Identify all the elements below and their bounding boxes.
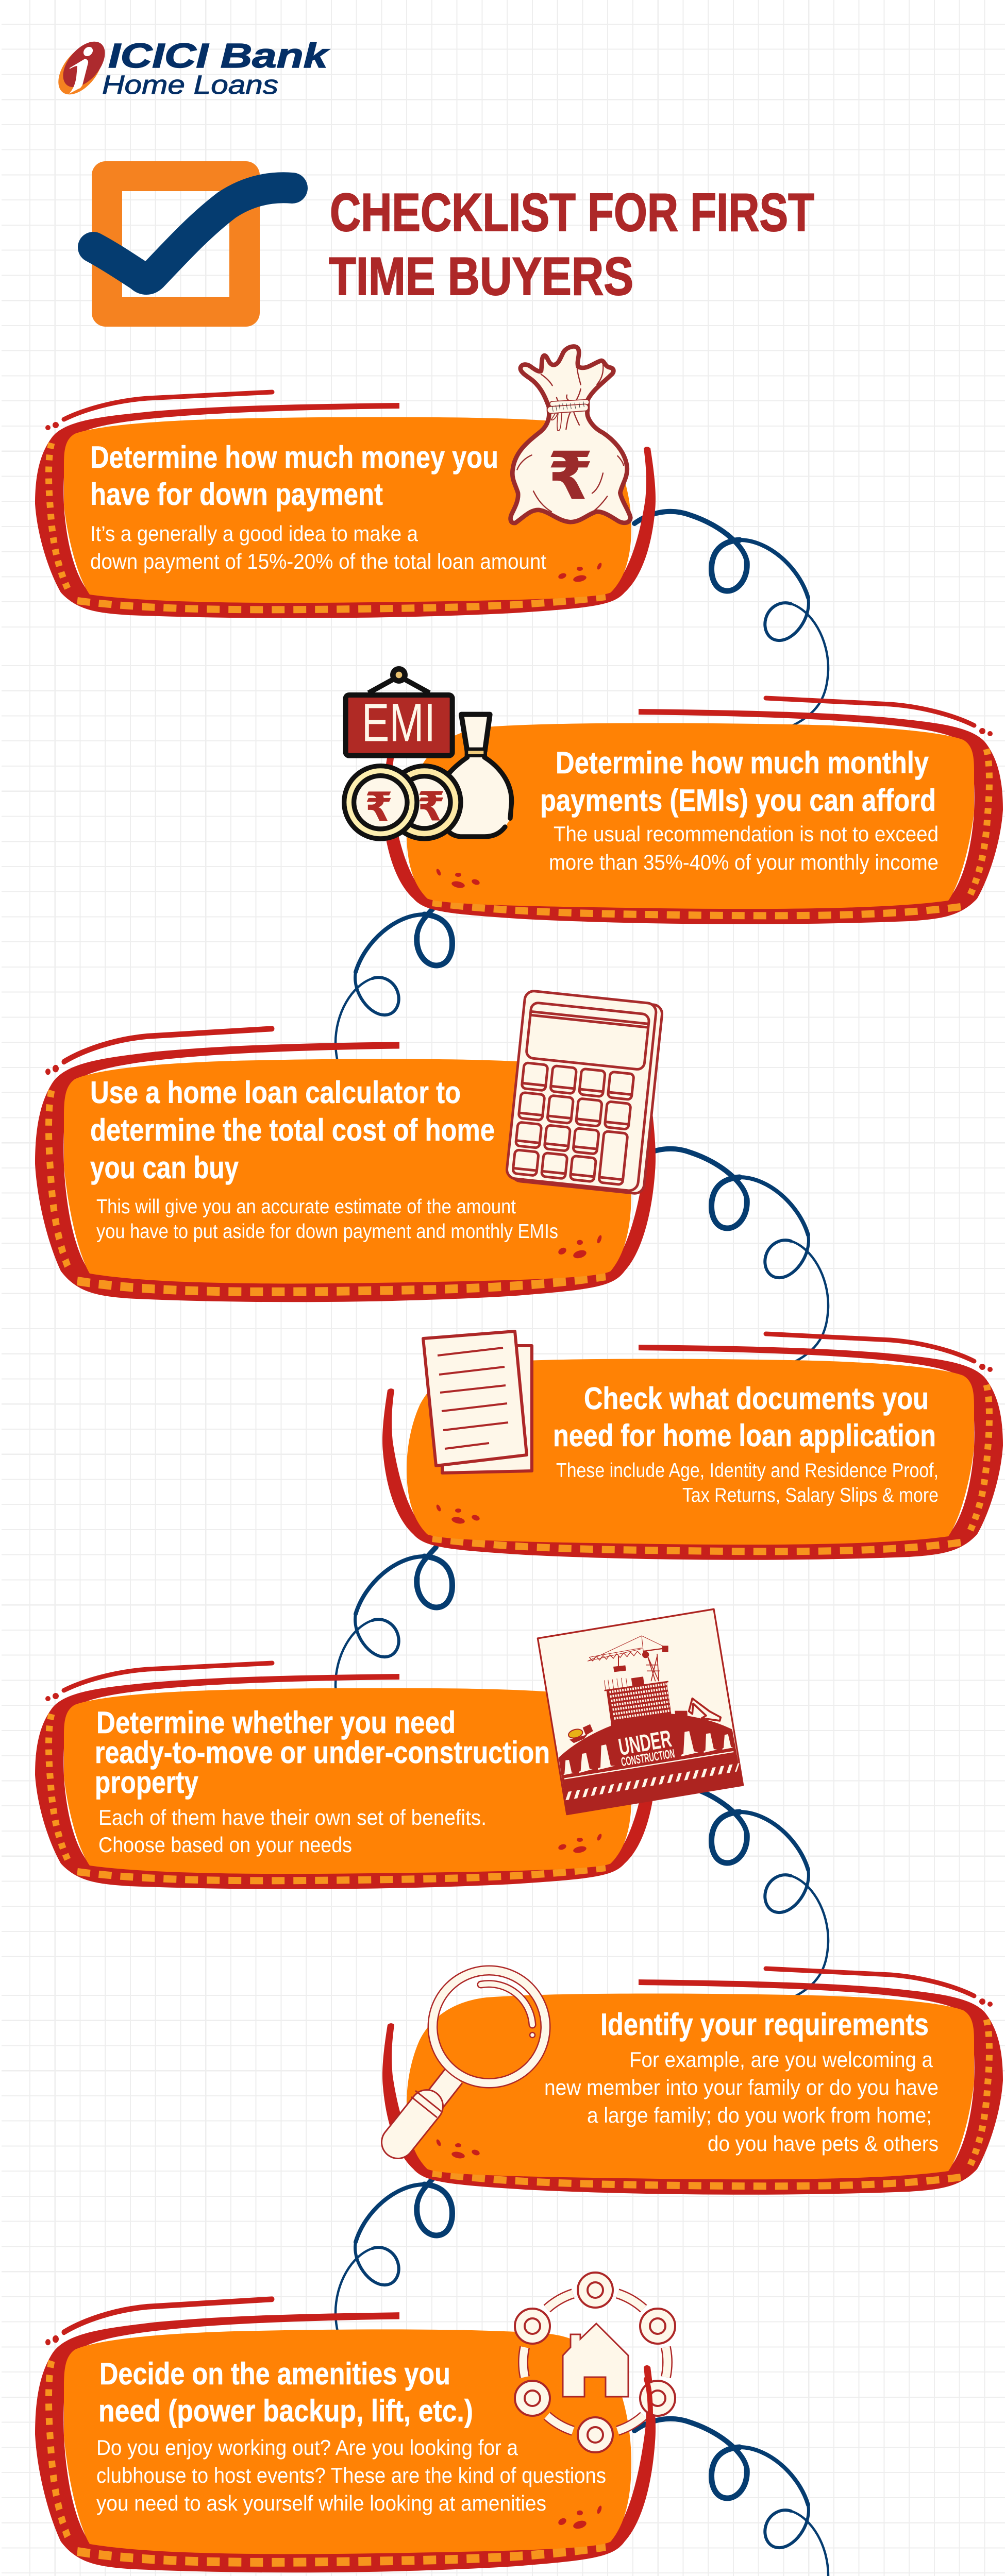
cones bbox=[563, 1731, 733, 1775]
step 7 heading: Decide on the amenities you bbox=[99, 2357, 450, 2391]
icon: house with amenity ring bbox=[515, 2273, 675, 2452]
step 7 body: Do you enjoy working out? Are you looking for a bbox=[96, 2435, 518, 2460]
connector squiggles between steps bbox=[336, 512, 828, 2576]
icon: checkbox with tick bbox=[92, 161, 292, 327]
step 7 heading: need (power backup, lift, etc.) bbox=[98, 2394, 473, 2428]
icon: EMI sign with coins and bag: ₹ bbox=[365, 784, 393, 831]
poster text: UNDER bbox=[616, 1725, 674, 1760]
icon: money bag bbox=[511, 346, 630, 523]
step 4 heading bbox=[553, 1381, 936, 1453]
step 4 body: Tax Returns, Salary Slips & more bbox=[682, 1484, 939, 1506]
panel: step 7 amenities bbox=[35, 2273, 675, 2572]
step 7 body: you need to ask yourself while looking at amenities bbox=[96, 2491, 546, 2515]
icon: under construction poster: CONSTRUCTION bbox=[620, 1747, 676, 1769]
step 2 heading: Determine how much monthly bbox=[556, 745, 929, 780]
step 1 body bbox=[90, 521, 546, 573]
step 2 body: more than 35%-40% of your monthly income bbox=[549, 850, 939, 874]
step 6 body: a large family; do you work from home; bbox=[587, 2103, 932, 2127]
step 6 body: do you have pets & others bbox=[708, 2131, 939, 2156]
panel: step 5 under construction bbox=[35, 1609, 743, 1889]
logo: ICICI Bank Home Loans bbox=[49, 34, 330, 103]
step 6 body bbox=[544, 2047, 939, 2156]
rope hatching bbox=[552, 401, 584, 412]
step 3 body bbox=[96, 1196, 558, 1243]
hazard stripes bbox=[567, 1767, 738, 1796]
icon: documents bbox=[423, 1331, 532, 1473]
step 2 heading bbox=[540, 745, 936, 818]
title: TIME BUYERS bbox=[329, 247, 633, 307]
step 3 body: you have to put aside for down payment and monthly EMIs bbox=[96, 1221, 558, 1243]
step 1 body: It’s a generally a good idea to make a bbox=[90, 521, 418, 546]
logo wordmark: ICICI Bank bbox=[108, 37, 330, 75]
icon: under construction poster bbox=[538, 1609, 743, 1815]
panel: step 3 calculator bbox=[35, 990, 663, 1302]
icon: calculator bbox=[506, 990, 663, 1194]
step 5 body: Each of them have their own set of benefits. bbox=[98, 1805, 487, 1829]
step 3 heading: Use a home loan calculator to bbox=[90, 1075, 461, 1110]
road line bbox=[564, 1752, 733, 1779]
step 3 heading: you can buy bbox=[90, 1150, 239, 1185]
step 5 heading bbox=[95, 1705, 550, 1800]
panel: step 6 requirements bbox=[382, 1969, 1003, 2195]
building bbox=[603, 1671, 673, 1723]
step 1 heading: Determine how much money you bbox=[90, 440, 498, 474]
step 2 body bbox=[549, 822, 939, 874]
step 6 heading: Identify your requirements bbox=[600, 2007, 929, 2042]
step 6 body: For example, are you welcoming a bbox=[629, 2047, 933, 2072]
step 6 body: new member into your family or do you have bbox=[544, 2075, 939, 2099]
panel: step 2 monthly payments bbox=[344, 669, 1003, 924]
rupee symbol: ₹ bbox=[547, 438, 593, 515]
step 4 heading: need for home loan application bbox=[553, 1418, 936, 1453]
step 3 heading bbox=[90, 1075, 495, 1185]
step 5 heading: property bbox=[95, 1765, 199, 1800]
mixer truck bbox=[567, 1728, 583, 1739]
step 3 heading: determine the total cost of home bbox=[90, 1113, 495, 1147]
title bbox=[329, 183, 814, 307]
icon: magnifying glass bbox=[398, 1970, 545, 2142]
step 5 body: Choose based on your needs bbox=[98, 1833, 352, 1857]
step 1 body: down payment of 15%-20% of the total loan amount bbox=[90, 549, 546, 573]
step 3 body: This will give you an accurate estimate of the amount bbox=[96, 1196, 516, 1218]
step 7 body: clubhouse to host events? These are the kind of questions bbox=[96, 2463, 606, 2487]
step 5 body bbox=[98, 1805, 487, 1857]
step 4 heading: Check what documents you bbox=[584, 1381, 929, 1416]
step 7 heading bbox=[98, 2357, 473, 2428]
step 5 heading: Determine whether you need bbox=[96, 1705, 456, 1740]
title: CHECKLIST FOR FIRST bbox=[330, 183, 814, 243]
step 1 heading bbox=[90, 440, 498, 512]
icon: EMI sign with coins and bag: ₹ bbox=[417, 784, 445, 831]
step 1 heading: have for down payment bbox=[90, 477, 383, 512]
step 7 body bbox=[96, 2435, 606, 2515]
step 5 heading: ready-to-move or under-construction bbox=[95, 1735, 550, 1770]
icon: EMI sign with coins and bag: EMI bbox=[362, 692, 435, 753]
step 2 body: The usual recommendation is not to exceed bbox=[554, 822, 939, 846]
icon: ICICI emblem bbox=[49, 34, 113, 103]
excavator bbox=[689, 1699, 721, 1721]
step 4 body bbox=[556, 1460, 939, 1506]
step 4 body: These include Age, Identity and Residence Proof, bbox=[556, 1460, 939, 1482]
step 2 heading: payments (EMIs) you can afford bbox=[540, 783, 936, 818]
panel: step 4 documents bbox=[382, 1331, 1003, 1560]
panel: step 1 down payment bbox=[35, 346, 656, 618]
logo subtitle: Home Loans bbox=[102, 70, 278, 99]
icon: EMI sign with coins and bag bbox=[344, 669, 512, 839]
crane bbox=[588, 1636, 668, 1681]
